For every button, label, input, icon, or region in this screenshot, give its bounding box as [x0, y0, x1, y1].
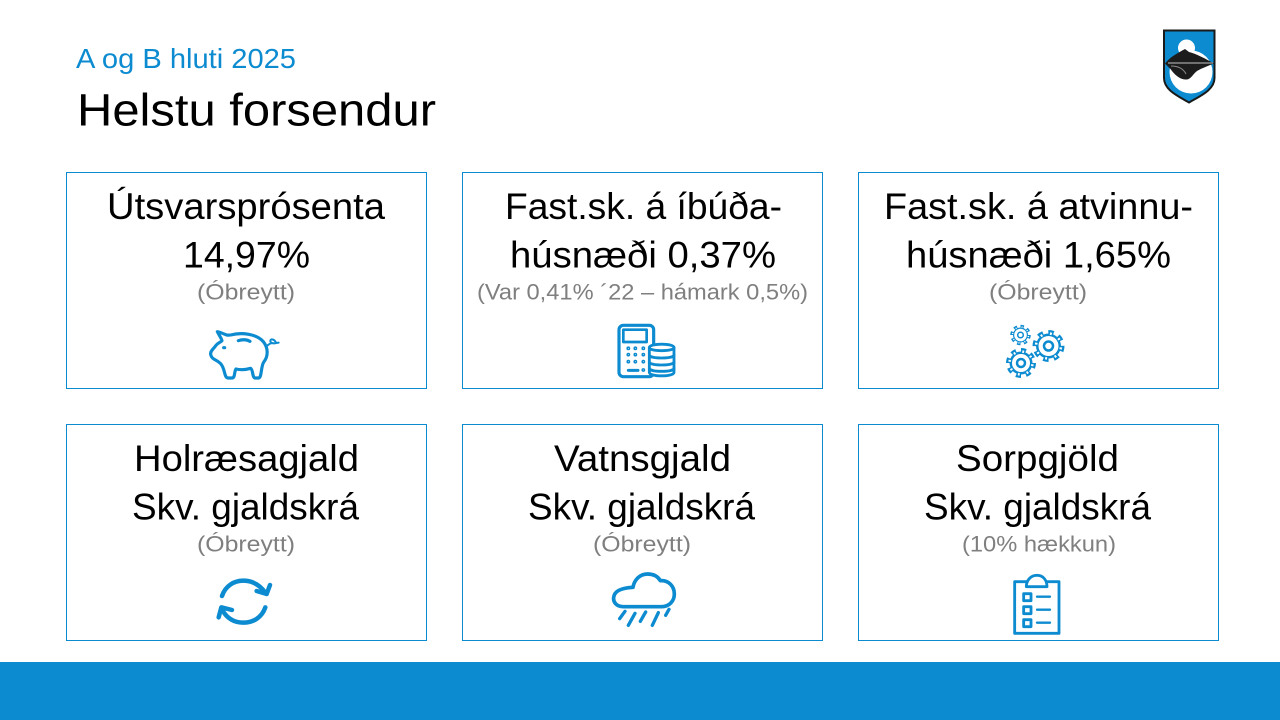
heading: útsvarsprósenta: Útsvarsprósenta	[107, 186, 385, 227]
heading: fast.sk. á íbúða-: Fast.sk. á íbúða-	[505, 186, 782, 227]
heading: vatnsgjald: Vatnsgjald	[554, 438, 731, 479]
icon: rain cloud	[614, 574, 674, 625]
icon: gears	[1008, 326, 1062, 376]
icon: piggy bank	[211, 332, 279, 378]
heading: sorpgjöld: Sorpgjöld	[956, 438, 1119, 479]
heading: fast.sk. á atvinnu-: Fast.sk. á atvinnu-	[884, 186, 1193, 227]
icon: coat of arms logo	[1164, 30, 1214, 102]
value: skv. gjaldskrá: Skv. gjaldskrá	[132, 486, 359, 528]
value: húsnæði 1,65%: húsnæði 1,65%	[906, 234, 1171, 276]
note: var 0,41%: (Var 0,41% ´22 – hámark 0,5%)	[477, 280, 808, 304]
value: skv. gjaldskrá: Skv. gjaldskrá	[528, 486, 755, 528]
note: óbreytt: (Óbreytt)	[989, 280, 1087, 304]
icon: clipboard checklist	[1015, 575, 1059, 633]
note: óbreytt: (Óbreytt)	[197, 280, 295, 304]
value: skv. gjaldskrá: Skv. gjaldskrá	[924, 486, 1151, 528]
panel: holræsagjald	[66, 424, 426, 640]
heading: holræsagjald: Holræsagjald	[134, 438, 359, 479]
value: húsnæði 0,37%: húsnæði 0,37%	[510, 234, 776, 276]
icon: calculator and coins	[619, 325, 674, 377]
panel: sorpgjöld	[858, 424, 1218, 640]
footer band	[0, 662, 1280, 720]
note: óbreytt: (Óbreytt)	[593, 532, 691, 556]
value: 14,97%: 14,97%	[183, 234, 310, 276]
panel: útsvarsprósenta	[66, 172, 426, 388]
title: Helstu forsendur	[77, 84, 436, 136]
icon: refresh arrows	[219, 581, 270, 623]
note: óbreytt: (Óbreytt)	[197, 532, 295, 556]
note: 10% hækkun: (10% hækkun)	[962, 532, 1116, 556]
subtitle: A og B hluti 2025	[76, 43, 296, 74]
panel: fasteignaskattur atvinnuhúsnæði	[858, 172, 1218, 388]
panel: fasteignaskattur íbúðarhúsnæði	[462, 172, 822, 388]
panel: vatnsgjald	[462, 424, 822, 640]
